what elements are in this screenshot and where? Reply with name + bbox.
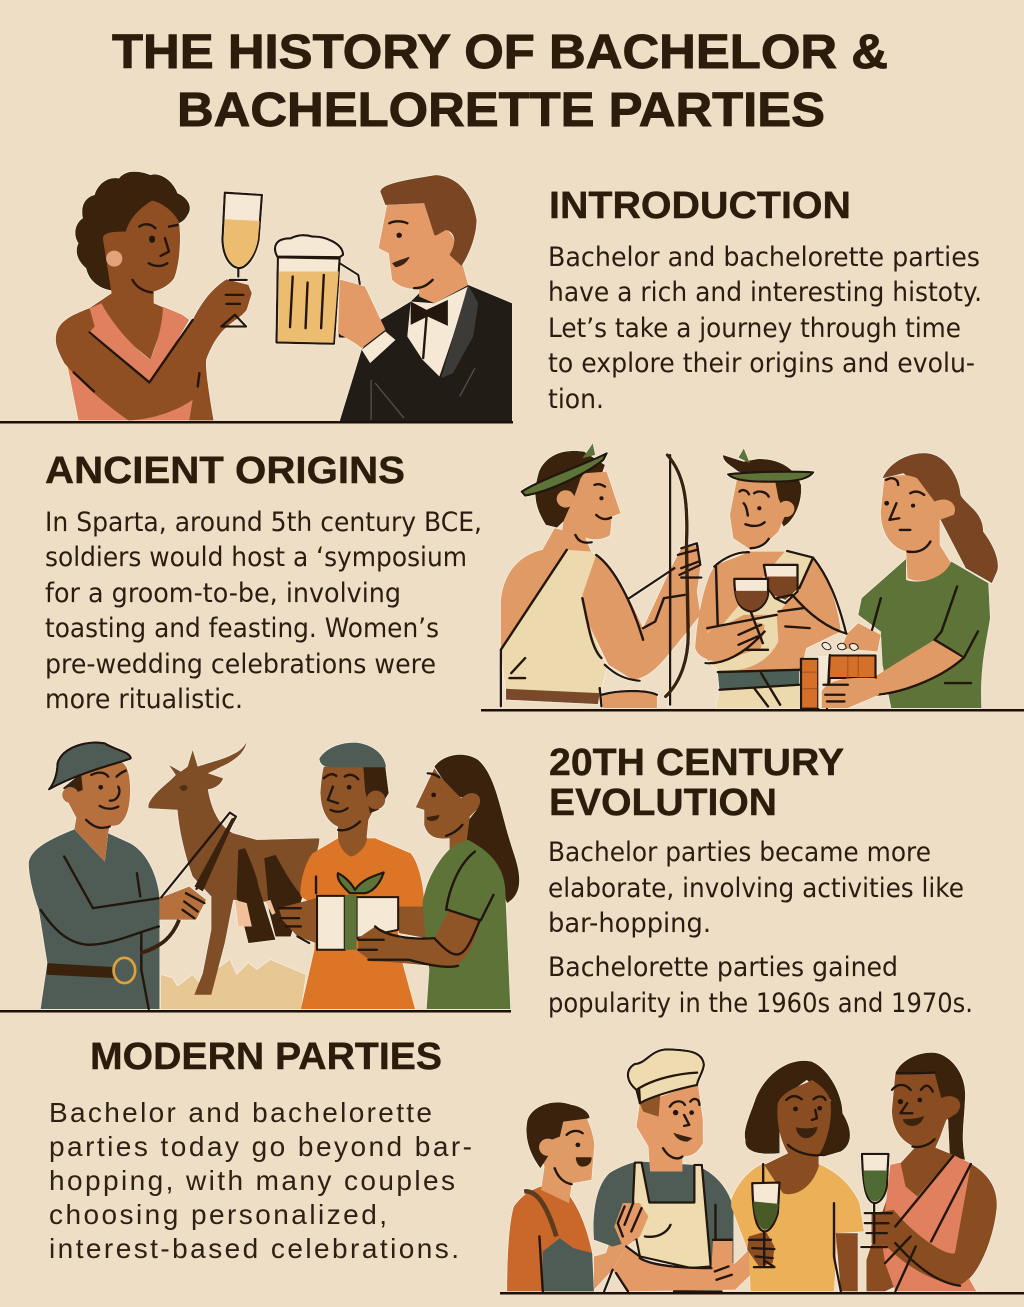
- woman in green: [358, 755, 519, 1009]
- text: 20th century evolution: elaborate, involving activities like: [548, 873, 964, 904]
- heading: modern parties: MODERN PARTIES: [90, 1036, 442, 1078]
- heading: 20th century evolution: EVOLUTION: [549, 782, 777, 824]
- hunter: [29, 742, 236, 1009]
- title: [112, 26, 888, 137]
- text: modern parties: hopping, with many couples: [49, 1165, 455, 1196]
- deer: [148, 742, 319, 995]
- text: ancient origins: more ritualistic.: [45, 684, 243, 715]
- text: modern parties: interest-based celebrations.: [49, 1233, 459, 1264]
- title: BACHELORETTE PARTIES: [177, 84, 825, 137]
- person with apron strap: [507, 1102, 648, 1291]
- illustration: woman and man toasting: [56, 172, 512, 421]
- illustration: modern group toasting: [507, 1049, 997, 1291]
- ground line: ancient origins: [481, 709, 1024, 712]
- bottles: [237, 848, 275, 943]
- heading: introduction: INTRODUCTION: [549, 185, 851, 227]
- text: introduction: Let’s take a journey through time: [548, 313, 961, 344]
- text: 20th century evolution: popularity in the 1960s and 1970s.: [548, 988, 973, 1019]
- heading: ancient origins: ANCIENT ORIGINS: [45, 450, 405, 492]
- man with bow: [501, 443, 701, 708]
- text: introduction: Bachelor and bachelorette parties: [548, 242, 980, 273]
- text: 20th century evolution: bar-hopping.: [548, 908, 711, 939]
- illustration: hunter, deer and gift: [29, 742, 519, 1009]
- woman in coral sash: [861, 1053, 997, 1291]
- text: ancient origins: [45, 507, 482, 715]
- backdrop ground: [161, 960, 306, 1009]
- heading: 20th century evolution: 20TH CENTURY: [549, 742, 844, 784]
- chef: [593, 1049, 773, 1291]
- woman with champagne: [56, 172, 262, 420]
- man with beer mug: [275, 175, 512, 421]
- text: modern parties: choosing personalized,: [49, 1199, 387, 1230]
- text: ancient origins: In Sparta, around 5th century BCE,: [45, 507, 482, 538]
- text: 20th century evolution: Bachelorette parties gained: [548, 952, 898, 983]
- heading: 20th century evolution: [549, 742, 844, 824]
- text: modern parties: Bachelor and bachelorette: [49, 1097, 432, 1128]
- text: ancient origins: toasting and feasting. Women’s: [45, 613, 439, 644]
- text: ancient origins: soldiers would host a ‘symposium: [45, 542, 467, 573]
- man with gift: [279, 743, 427, 1009]
- illustration: ancient Greeks toasting: [501, 443, 998, 709]
- text: introduction: to explore their origins and evolu-: [548, 348, 975, 379]
- ground line: modern parties: [500, 1292, 1024, 1294]
- woman with gift: [801, 453, 998, 709]
- text: 20th century evolution: [548, 837, 973, 1019]
- ground line: 20th century: [0, 1010, 511, 1012]
- text: ancient origins: for a groom-to-be, involving: [45, 578, 401, 609]
- text: introduction: [548, 242, 982, 415]
- text: 20th century evolution: Bachelor parties became more: [548, 837, 931, 868]
- text: ancient origins: pre-wedding celebrations were: [45, 649, 436, 680]
- text: modern parties: [49, 1097, 472, 1264]
- woman in yellow: [731, 1061, 864, 1291]
- ground line: introduction: [0, 421, 513, 424]
- text: introduction: have a rich and interesting histoty.: [548, 277, 982, 308]
- text: introduction: tion.: [548, 384, 604, 415]
- middle man with wine: [695, 448, 848, 708]
- title: THE HISTORY OF BACHELOR &: [112, 26, 888, 79]
- text: modern parties: parties today go beyond bar-: [49, 1131, 472, 1162]
